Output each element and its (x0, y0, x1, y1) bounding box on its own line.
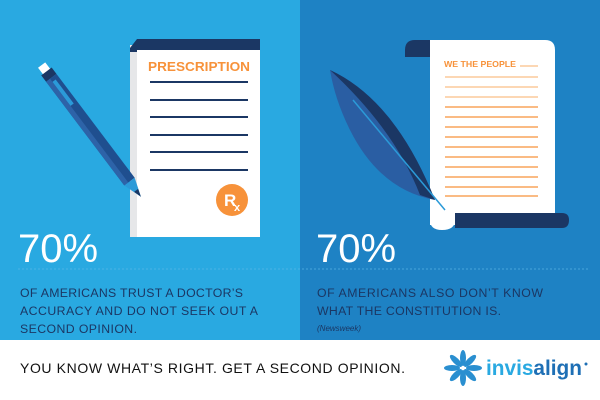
text: prescription heading: PRESCRIPTION (148, 59, 250, 74)
icon: scroll (405, 40, 569, 230)
icon: Rx badge: R (224, 191, 236, 210)
stat: right 70%: 70% (316, 227, 396, 271)
text: right description: OF AMERICANS ALSO DON’T KNOW (317, 286, 543, 300)
stat: left 70%: 70% (18, 227, 98, 271)
icon: Rx badge: x (234, 202, 241, 214)
icon: pen (36, 61, 146, 201)
logo: invisalign (444, 350, 588, 386)
text: we the people: WE THE PEOPLE (444, 59, 516, 69)
text: left description: OF AMERICANS TRUST A DOCTOR’S (20, 286, 243, 300)
logo: invisalign: invisalign (486, 357, 582, 380)
panel: right background (300, 0, 600, 340)
panel: left background (0, 0, 300, 340)
text: left description: ACCURACY AND DO NOT SEEK OUT A (20, 304, 259, 318)
icon: prescription paper (130, 39, 260, 237)
text: left description: SECOND OPINION. (20, 322, 137, 336)
text: source: (Newsweek) (317, 324, 361, 333)
icon: feather quill (330, 70, 445, 210)
icon: Rx badge (216, 184, 248, 216)
tagline: YOU KNOW WHAT’S RIGHT. GET A SECOND OPINION. (20, 360, 405, 376)
text: right description: WHAT THE CONSTITUTION IS. (317, 304, 501, 318)
